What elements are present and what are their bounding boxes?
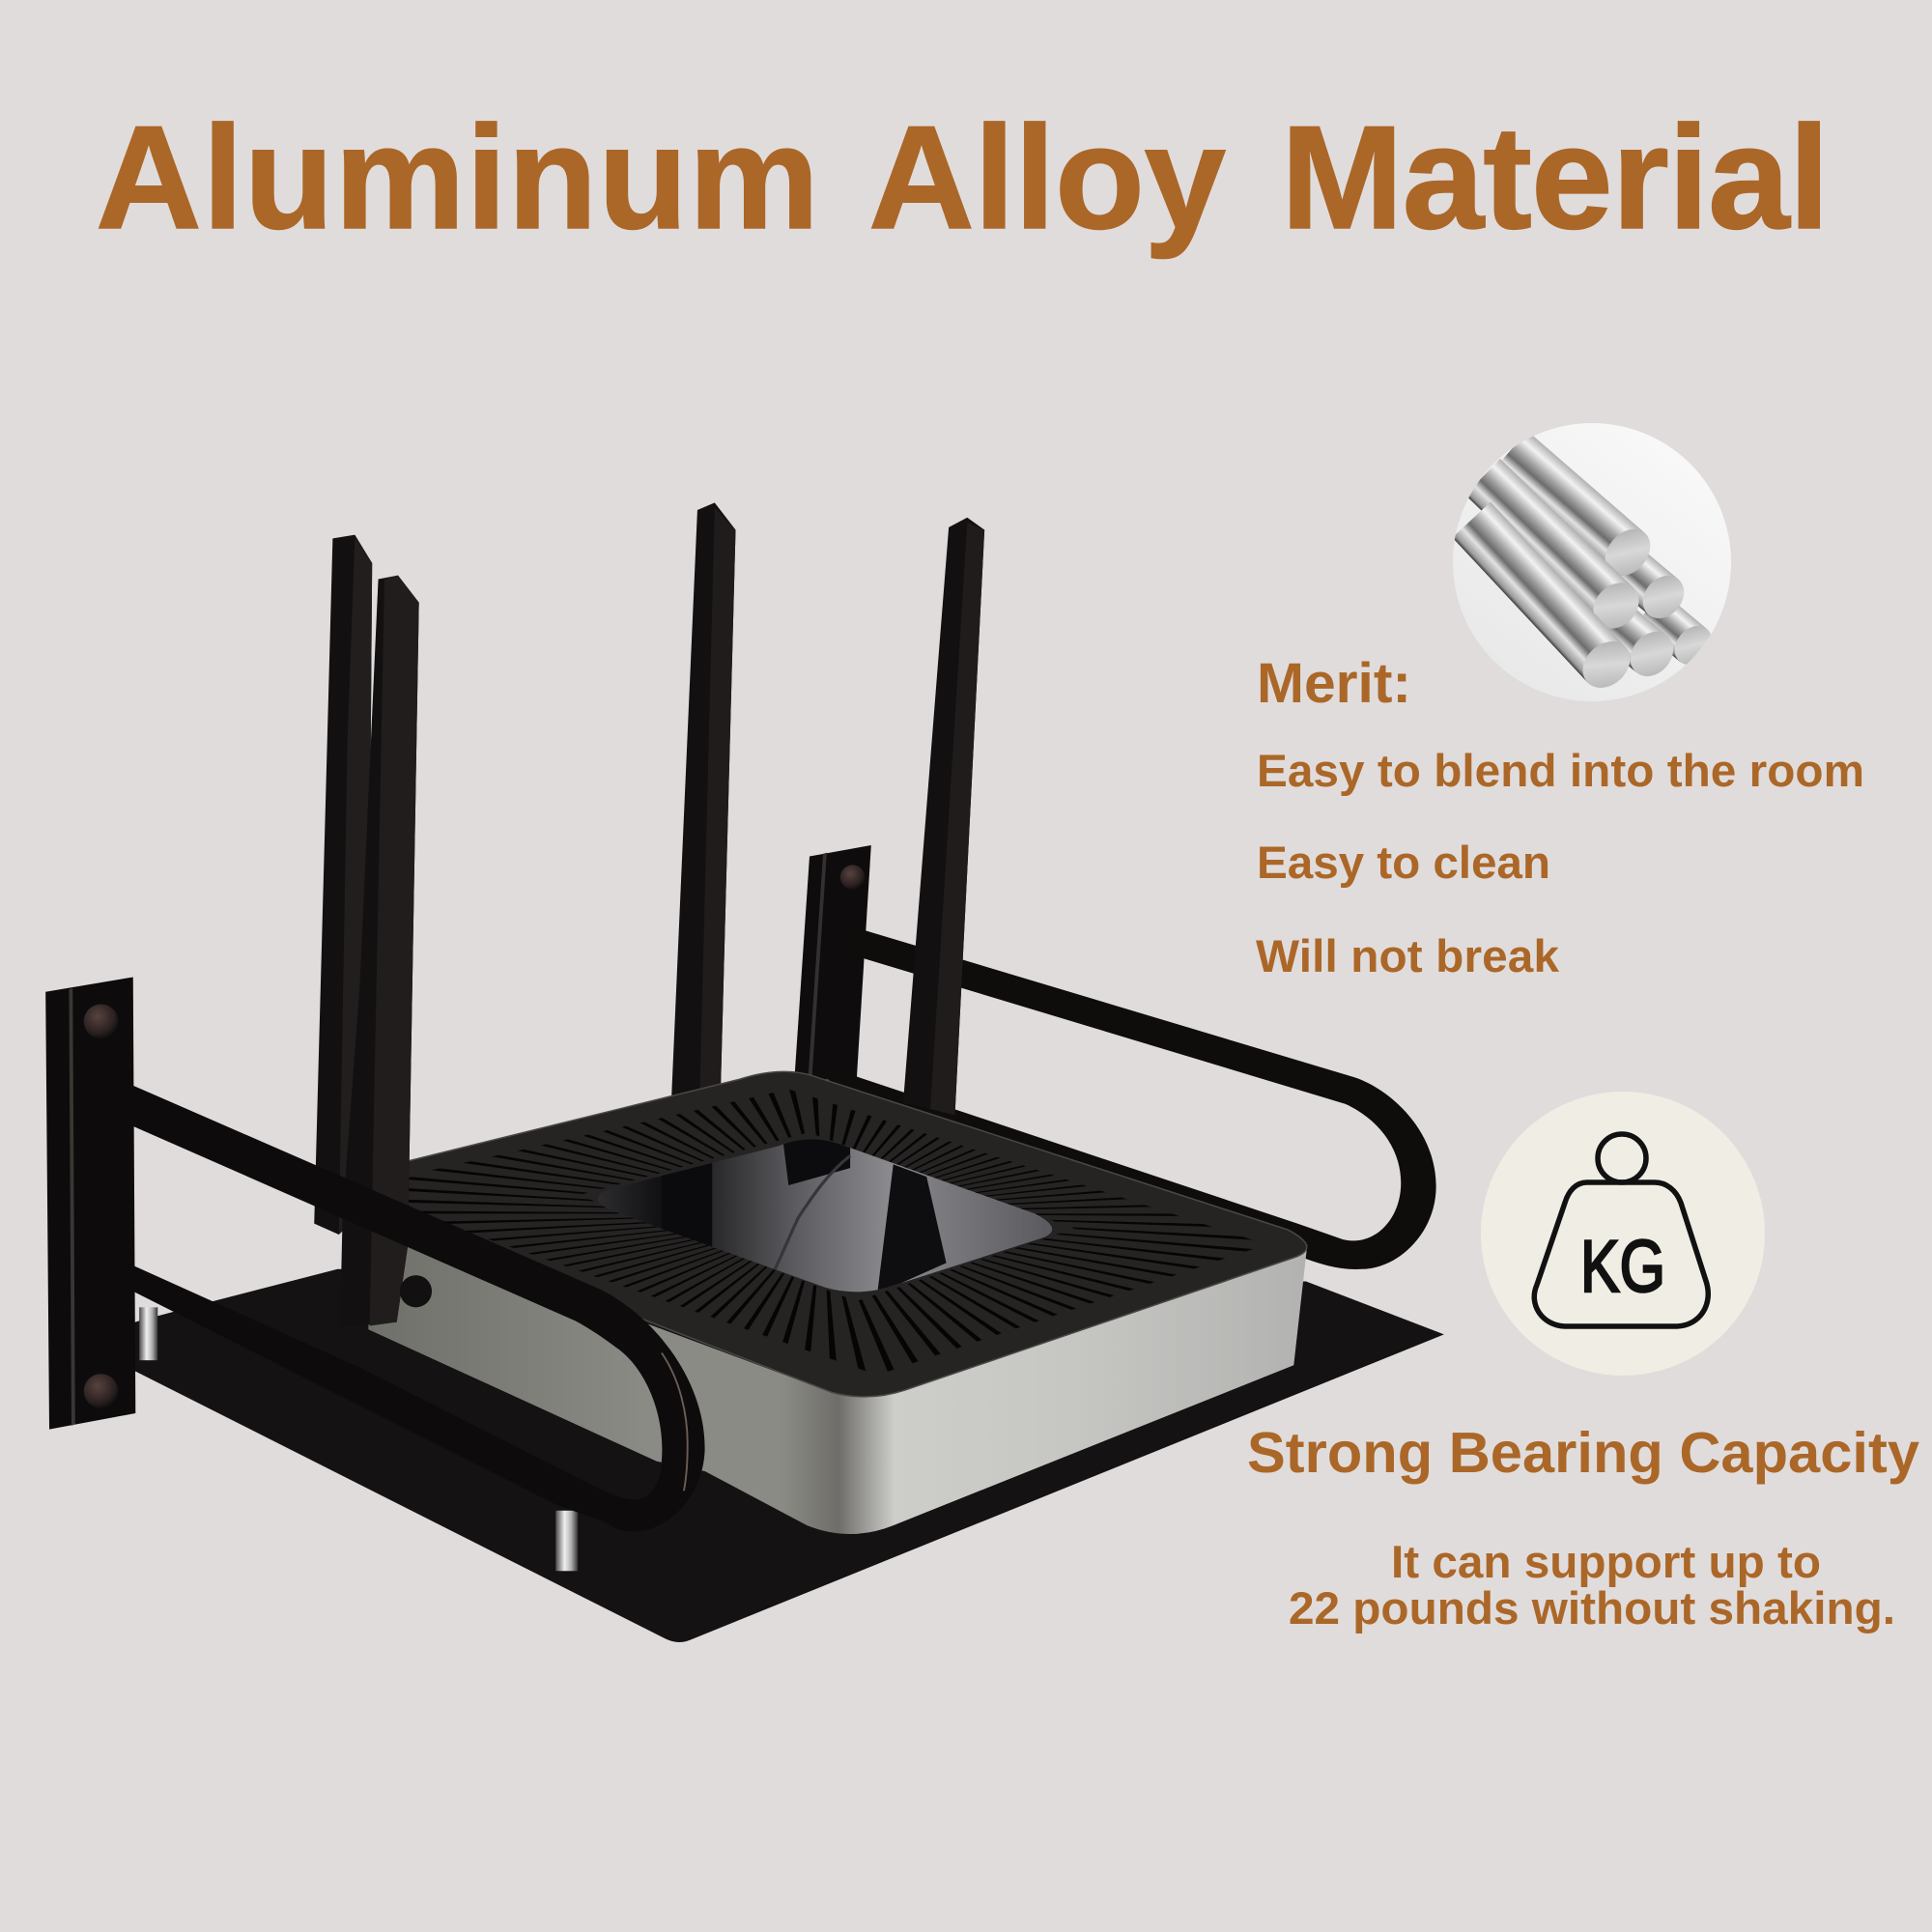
merit list bbox=[1256, 652, 1864, 982]
support pin left bbox=[139, 1307, 157, 1360]
product photo: router on black wall shelf bbox=[45, 502, 1444, 1642]
left wall bracket bbox=[45, 977, 135, 1430]
merit heading: Merit: bbox=[1257, 652, 1411, 715]
stacked rods bbox=[1452, 431, 1719, 697]
rail nut bbox=[400, 1275, 432, 1307]
aluminium rods icon bbox=[1452, 423, 1731, 701]
title: Alloy bbox=[868, 96, 1226, 260]
title: Material bbox=[1281, 96, 1830, 260]
router vent ribs bbox=[527, 1099, 1119, 1328]
bearing capacity heading: Strong Bearing Capacity bbox=[1247, 1420, 1919, 1485]
merit item 3: Will not break bbox=[1256, 931, 1559, 982]
router body bbox=[368, 1071, 1307, 1534]
front rail bbox=[89, 1067, 705, 1532]
shelf base plate bbox=[93, 1269, 1444, 1642]
router top face bbox=[370, 1071, 1307, 1397]
router silver side bbox=[368, 1220, 1307, 1534]
front antenna rear bbox=[314, 535, 372, 1235]
back wall bracket bbox=[795, 845, 871, 1084]
weight ring bbox=[1598, 1134, 1646, 1182]
support pin right bbox=[555, 1511, 578, 1571]
back rail bbox=[813, 924, 1436, 1269]
merit item 2: Easy to clean bbox=[1257, 838, 1550, 889]
cream disc bbox=[1481, 1092, 1765, 1376]
lower screw bbox=[84, 1374, 118, 1408]
merit item 1: Easy to blend into the room bbox=[1257, 746, 1864, 797]
white disc bbox=[1453, 423, 1731, 701]
back antenna left bbox=[671, 502, 735, 1096]
kg label: KG bbox=[1580, 1226, 1665, 1308]
back antenna right bbox=[903, 518, 984, 1115]
bearing capacity description: 22 pounds without shaking. bbox=[1289, 1583, 1895, 1634]
router glass panel bbox=[598, 1139, 1052, 1293]
weight body bbox=[1534, 1182, 1708, 1326]
title: Aluminum bbox=[96, 96, 819, 260]
bearing capacity description bbox=[1289, 1537, 1895, 1634]
upper screw bbox=[84, 1005, 118, 1038]
front antenna front bbox=[340, 576, 419, 1327]
bearing capacity description: It can support up to bbox=[1391, 1537, 1821, 1588]
kg weight icon bbox=[1481, 1092, 1765, 1376]
